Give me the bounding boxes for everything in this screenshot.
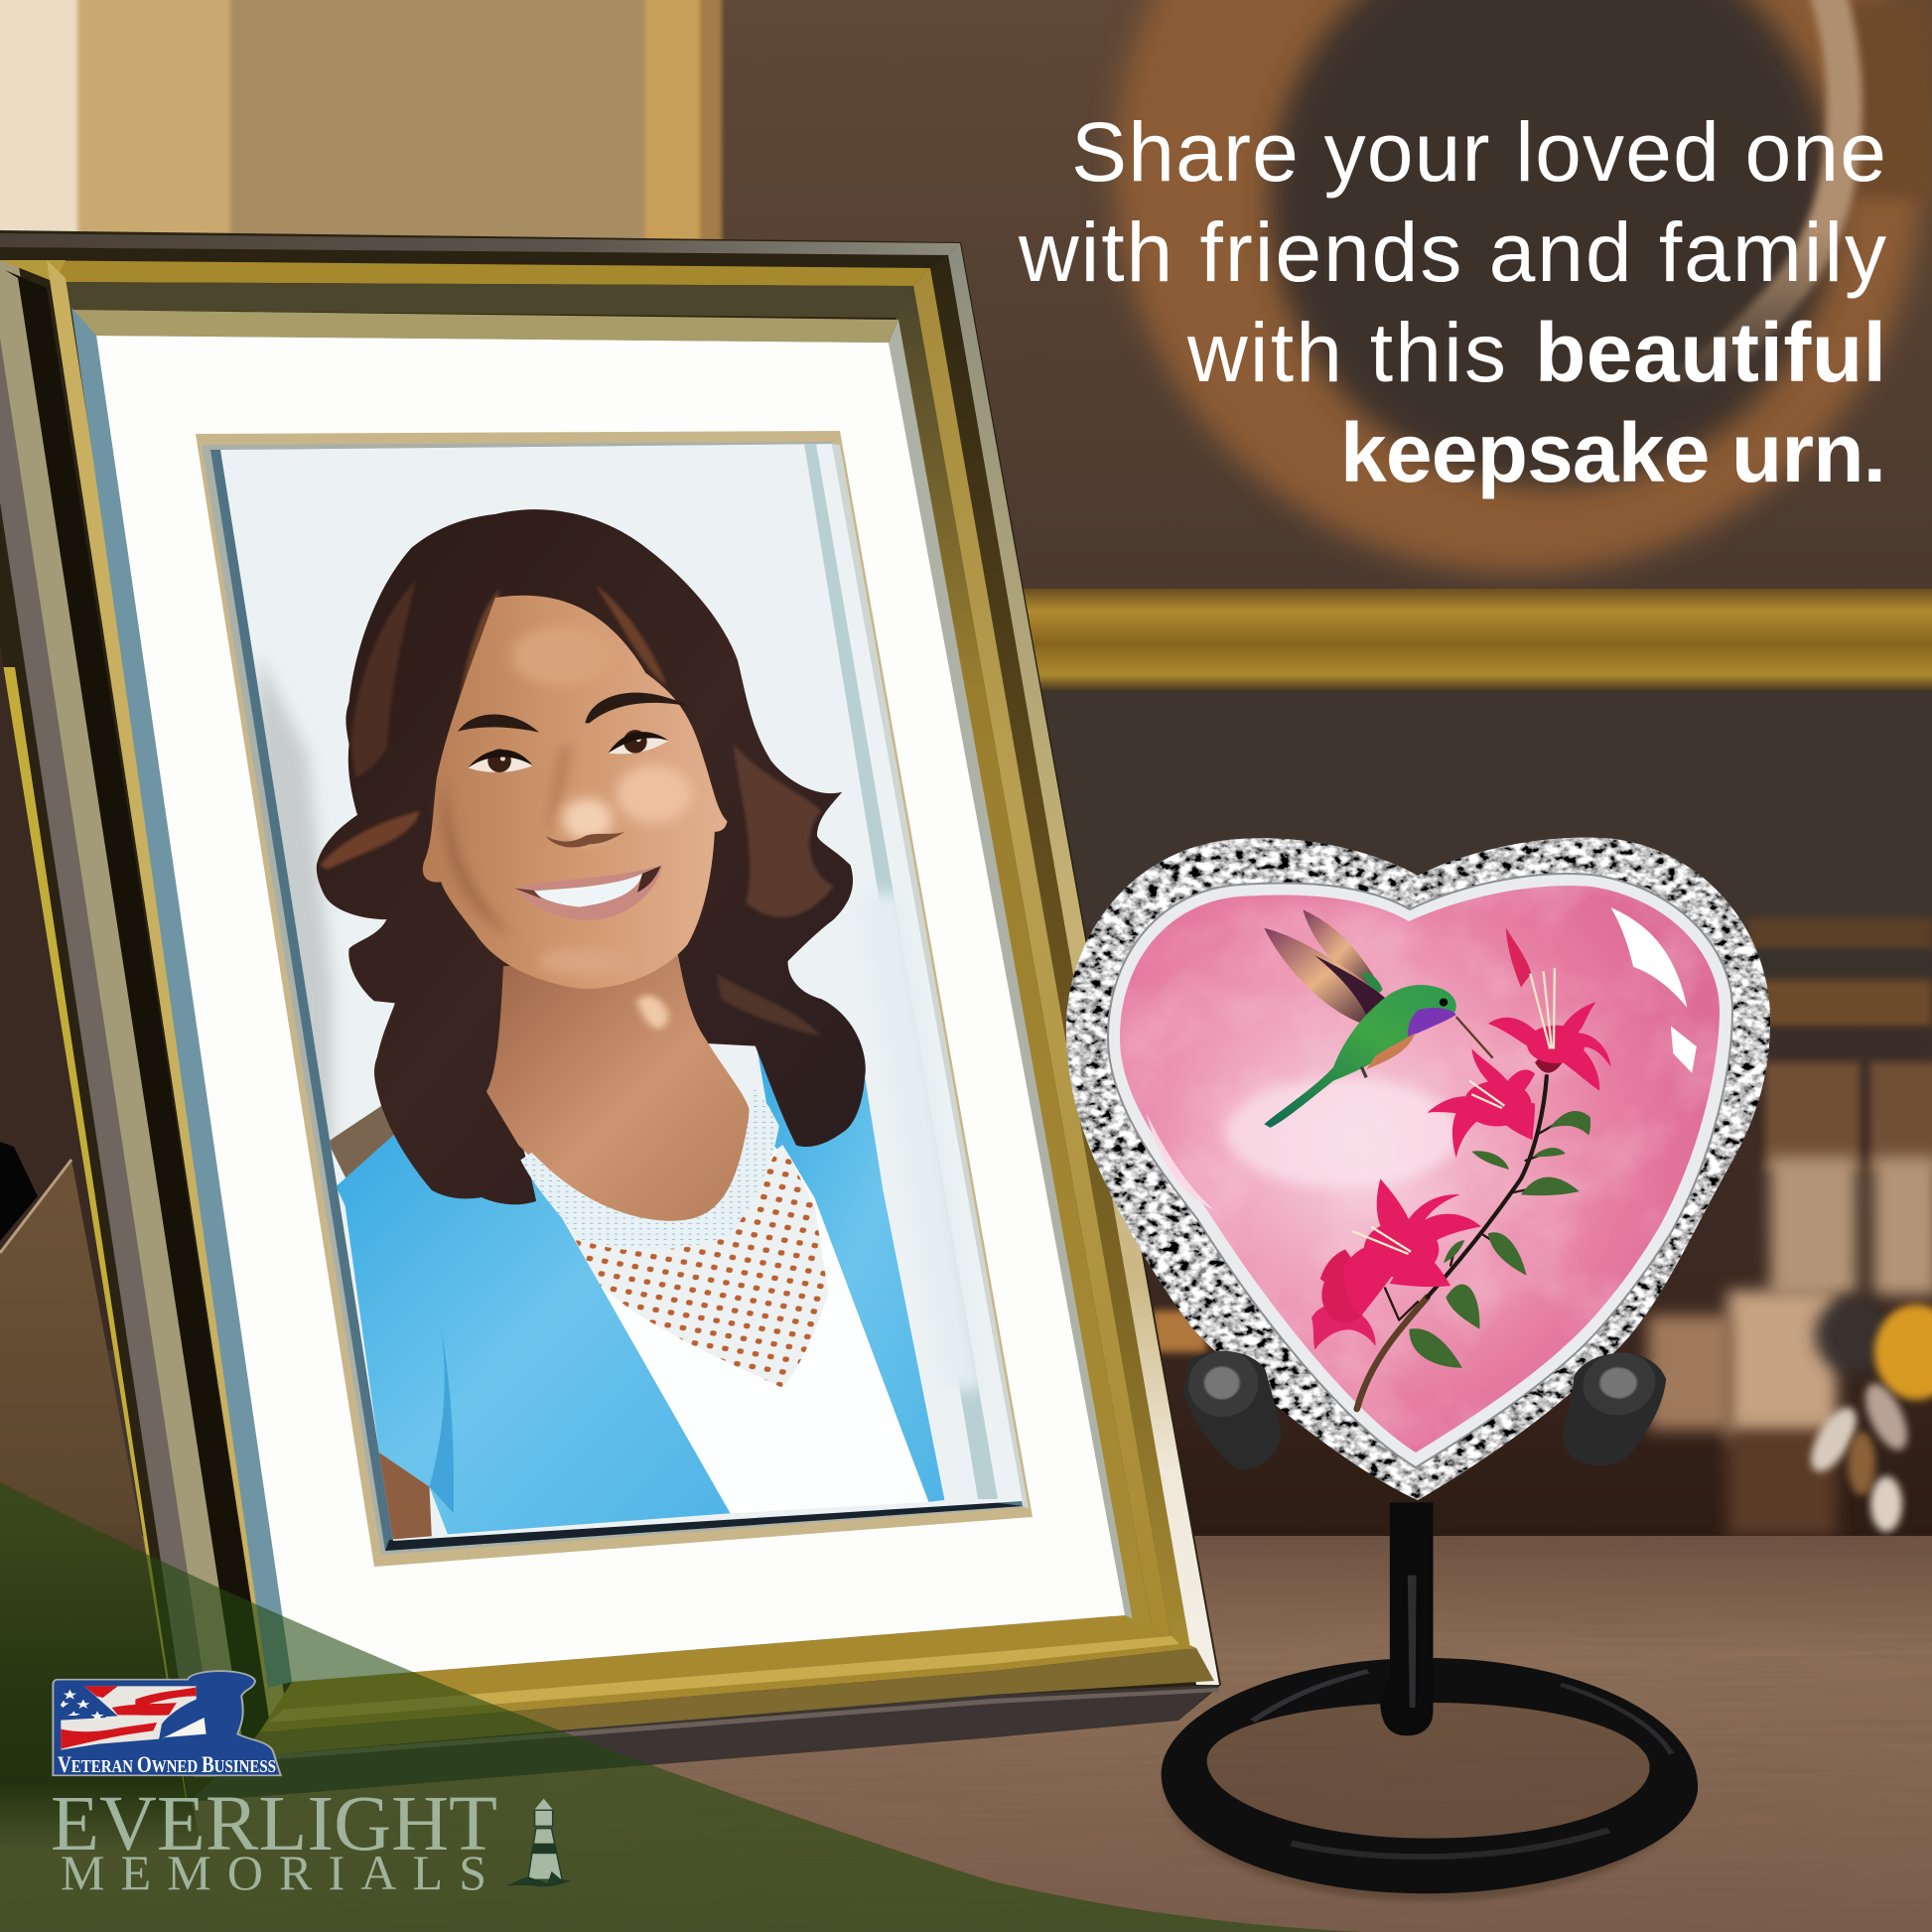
lace collar and netting (520, 1084, 828, 1388)
white blouse (601, 1145, 928, 1513)
lighthouse icon (506, 1799, 571, 1886)
inner gold lip (196, 431, 1033, 1567)
green corner overlay (0, 1482, 1363, 1932)
headline: beautiful (1535, 306, 1886, 399)
right peg (1563, 1344, 1666, 1465)
arm (379, 1452, 432, 1540)
bevel (202, 442, 1025, 1555)
neck (486, 955, 828, 1388)
stand base ring and post (1162, 1502, 1698, 1901)
frame outer body (0, 230, 1221, 1802)
wall below shelf (1023, 685, 1932, 933)
headline: Share your loved one (1071, 105, 1886, 199)
curtain and wood panels at top left (0, 0, 722, 248)
eyes (469, 730, 669, 772)
left peg (1178, 1341, 1281, 1469)
left moulding stripes (0, 260, 297, 1799)
branch (1357, 1076, 1563, 1409)
smile (514, 865, 662, 920)
blue top (336, 1134, 731, 1534)
pink dome (1120, 886, 1720, 1452)
upper flower (1488, 928, 1611, 1091)
leaves (1410, 1111, 1590, 1368)
eyebrows (458, 693, 690, 733)
headline: with friends and family (1018, 206, 1886, 299)
heart body (1066, 838, 1770, 1500)
everlight memorials logo: MEMORIALS (61, 1845, 486, 1900)
headline (1018, 105, 1886, 499)
gold shelf (1023, 589, 1932, 690)
wooden table (0, 1536, 1932, 1932)
keepsake urn on stand (1066, 838, 1770, 1901)
white mat (96, 336, 1125, 1682)
lower flower (1311, 1178, 1481, 1349)
middle flower (1428, 1048, 1535, 1159)
face (423, 596, 727, 989)
flag (61, 1686, 207, 1750)
bottom moulding stripes (189, 1615, 1219, 1802)
artwork and gloss (1146, 907, 1697, 1409)
watercolor clouds (1120, 886, 1720, 1452)
veteran owned business badge (53, 1671, 281, 1777)
hummingbird (1264, 909, 1493, 1128)
bright rim (1108, 874, 1732, 1467)
hair (317, 509, 866, 1204)
nose (545, 832, 624, 847)
top moulding stripes (0, 233, 960, 343)
headline: keepsake urn. (1340, 406, 1886, 499)
photo backdrop (199, 437, 1042, 1549)
right moulding stripes (889, 243, 1219, 1685)
framed portrait photo (199, 437, 1042, 1549)
badge label: VETERAN OWNED BUSINESS (58, 1752, 276, 1777)
headline: with this (1186, 306, 1506, 399)
everlight memorials logo: EVERLIGHT (51, 1781, 497, 1867)
hair highlights (320, 581, 834, 1036)
clothing (336, 1038, 944, 1540)
facial shading (441, 627, 692, 974)
blurred bookshelf (1023, 918, 1932, 1539)
blurred round mirror (1115, 0, 1932, 573)
left wall, black object and cardboard stand (0, 635, 201, 1847)
flowers (1311, 928, 1611, 1349)
gloss highlights (1146, 907, 1697, 1209)
silver border (1066, 838, 1770, 1500)
photo frame (0, 230, 1221, 1802)
